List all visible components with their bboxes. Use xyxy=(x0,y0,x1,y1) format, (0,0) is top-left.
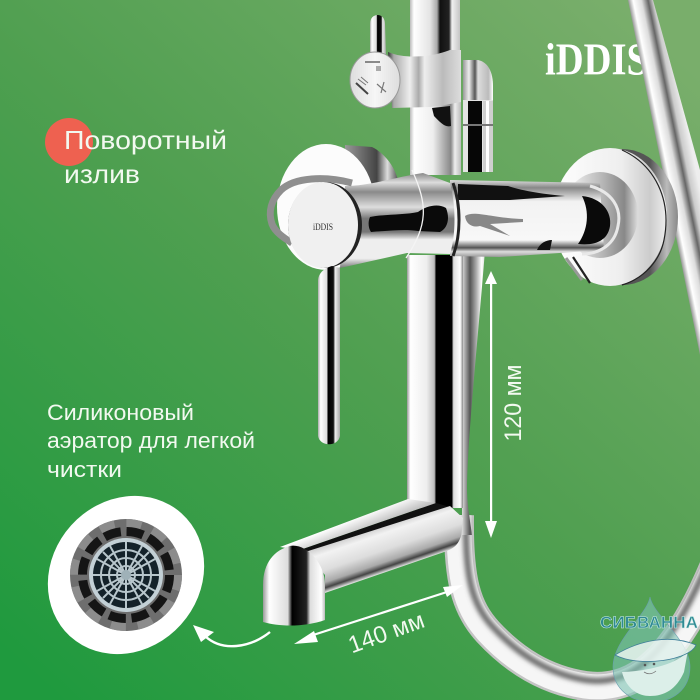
red accent circle xyxy=(45,118,93,166)
handle front cap with logo: iDDIS xyxy=(313,222,333,232)
wall plate left xyxy=(277,144,398,270)
arrow: 120 mm height xyxy=(485,271,497,538)
handle ribbon xyxy=(270,179,352,243)
wall plate right xyxy=(553,148,678,286)
riser pipe lower xyxy=(407,255,463,508)
diverter body xyxy=(388,50,461,108)
handle lever xyxy=(318,266,340,444)
riser pipe middle xyxy=(410,100,461,175)
text block: silicone aerator: аэратор для легкой xyxy=(47,428,255,453)
heading: rotating spout xyxy=(64,125,227,189)
hose: thin upper strand xyxy=(462,250,485,535)
arrow: 140 mm width xyxy=(294,585,463,644)
barrel ring highlight xyxy=(406,170,423,258)
hose: lower loop xyxy=(459,515,700,687)
diverter knob with icons xyxy=(350,52,400,108)
barrel dark reflection xyxy=(369,205,448,232)
watermark: Sibvanna logo xyxy=(600,597,698,700)
hose: upper right strand xyxy=(628,0,700,355)
label: 120 mm: 120 мм xyxy=(500,364,527,442)
curved arrow: from spout to aerator xyxy=(193,625,270,646)
mixer arm to wall xyxy=(450,180,604,257)
text block: silicone aerator xyxy=(47,400,255,482)
text block: silicone aerator: Силиконовый xyxy=(47,400,194,425)
heading: rotating spout: Поворотный xyxy=(64,125,227,155)
small bypass pipe xyxy=(463,60,493,172)
watermark: Sibvanna logo: СИБВАННА xyxy=(600,613,698,632)
text block: silicone aerator: чистки xyxy=(47,457,122,482)
mixer barrel xyxy=(340,173,454,268)
spout end xyxy=(263,546,325,626)
heading: rotating spout: излив xyxy=(64,159,140,189)
label: 140 mm: 140 мм xyxy=(345,607,428,659)
diverter lever xyxy=(370,15,386,56)
riser dark reflection xyxy=(432,106,451,126)
aerator photo xyxy=(15,464,237,686)
logo: iDDIS: iDDIS xyxy=(545,34,648,84)
riser pipe upper xyxy=(410,0,460,60)
arm reflections xyxy=(453,183,619,256)
spout tube xyxy=(280,499,463,593)
handle front cap with logo xyxy=(288,182,362,268)
